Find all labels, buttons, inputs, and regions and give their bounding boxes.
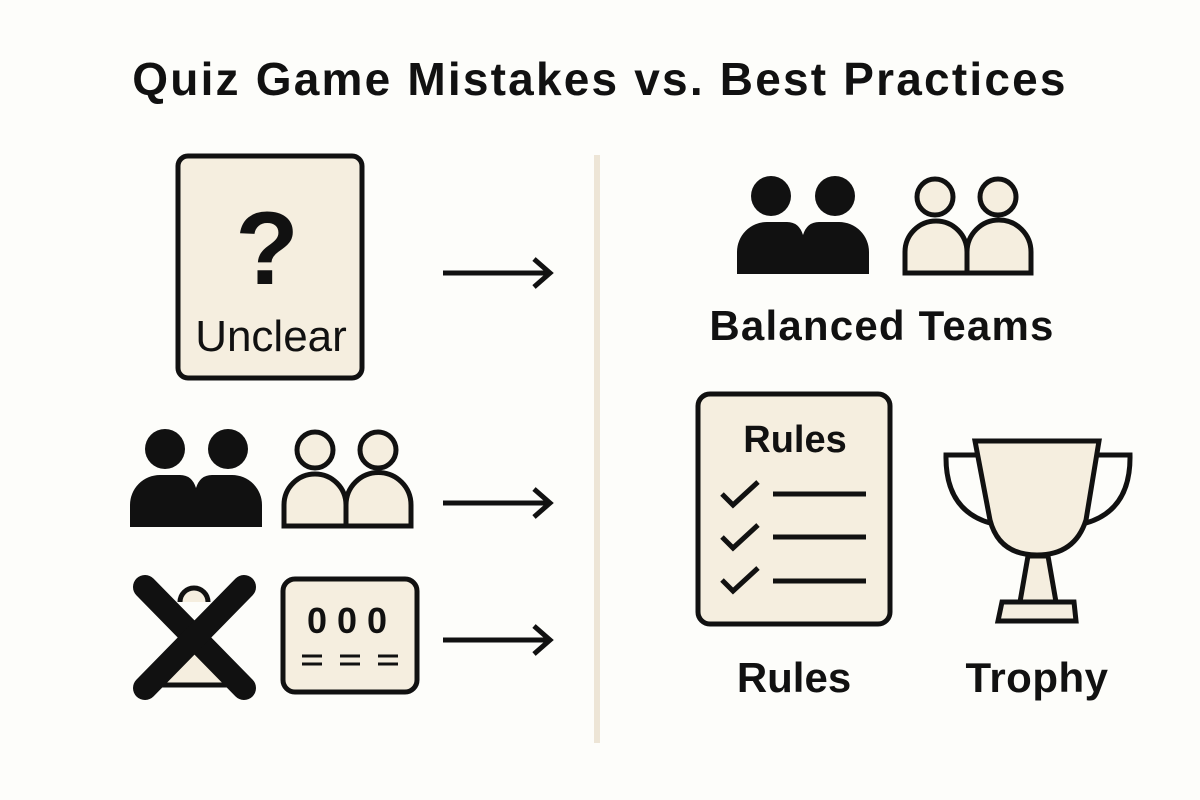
title: Quiz Game Mistakes vs. Best Practices — [132, 53, 1068, 105]
card: unclear — [178, 156, 362, 378]
icon: crossed bell — [145, 587, 244, 688]
icon: trophy — [946, 441, 1130, 621]
arrow 3 — [443, 626, 550, 654]
icon: black team left — [130, 429, 262, 527]
divider — [594, 155, 600, 743]
arrow 2 — [443, 489, 550, 517]
icon: rules sheet — [698, 394, 890, 624]
icon: rules sheet: Rules — [743, 419, 847, 461]
icon: outline team right — [905, 179, 1031, 273]
card: unclear: ? — [235, 191, 299, 307]
label: balanced teams: Balanced Teams — [709, 302, 1055, 349]
icon: outline team left — [284, 432, 411, 526]
arrow 1 — [443, 259, 550, 287]
icon: scoreboard — [283, 579, 417, 692]
icon: black team right — [737, 176, 869, 274]
card: unclear: Unclear — [195, 312, 347, 361]
label: rules: Rules — [737, 654, 851, 701]
icon: scoreboard: 000 — [307, 600, 397, 641]
label: trophy: Trophy — [965, 654, 1108, 701]
